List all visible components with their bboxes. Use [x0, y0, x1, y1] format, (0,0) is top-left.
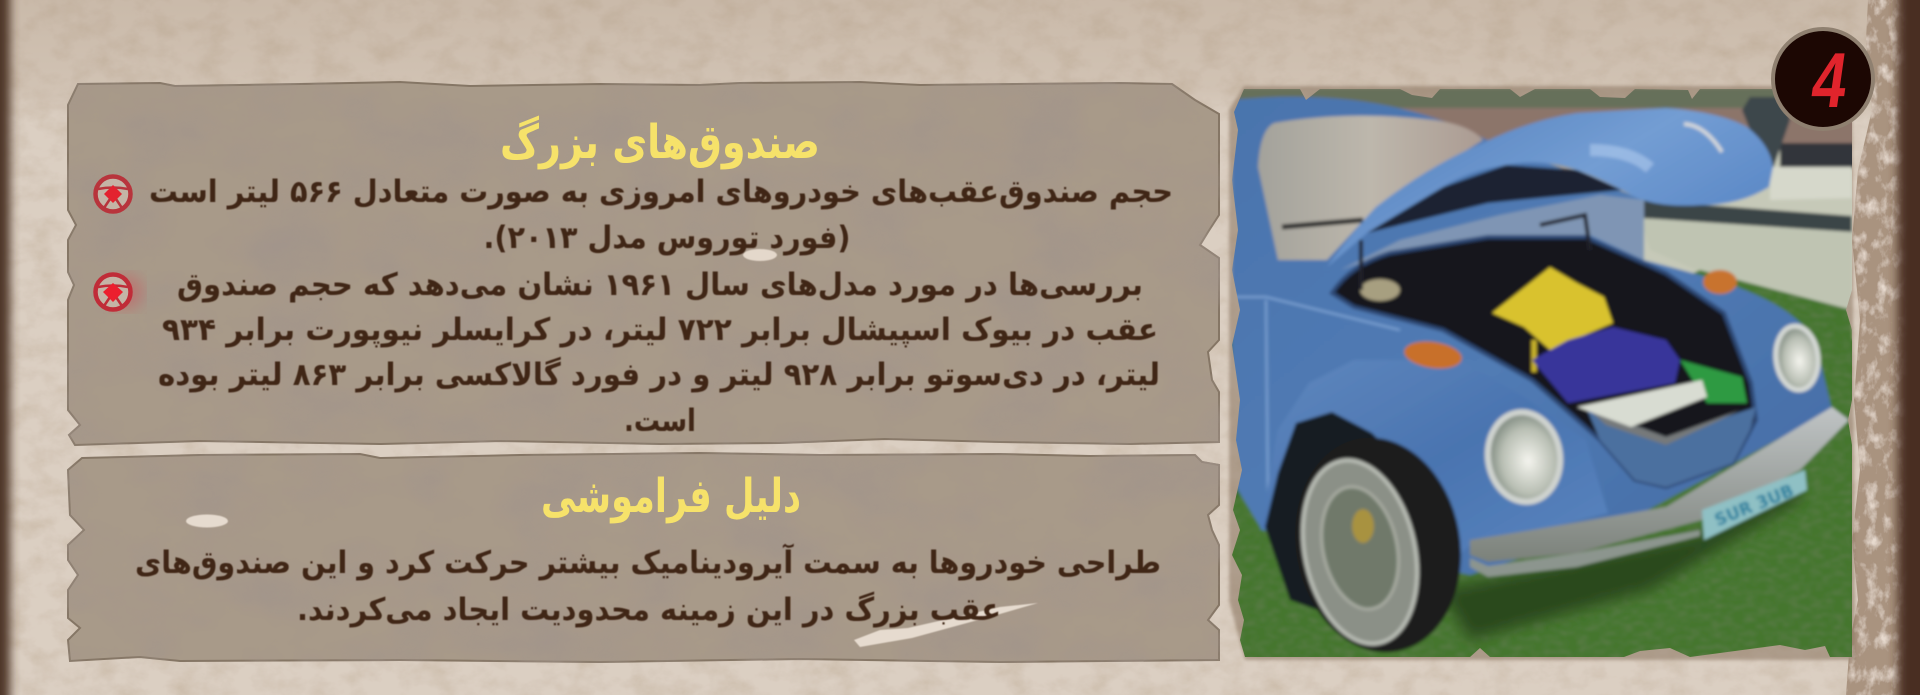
blue bag — [1532, 327, 1680, 403]
trunk floor — [1586, 407, 1756, 487]
neighbouring white car — [1642, 96, 1852, 235]
headlight right — [1773, 324, 1821, 392]
wheel arch — [1263, 410, 1378, 610]
panel: reason forgotten — [68, 453, 1219, 662]
text block: trunk volumes: (فورد توروس مدل ۲۰۱۳). — [484, 220, 850, 256]
lid handle — [1684, 124, 1722, 152]
tear mark — [743, 249, 777, 261]
raised lid underside — [1367, 165, 1622, 233]
green cloth — [1680, 360, 1747, 403]
beige luggage — [1360, 279, 1400, 301]
indicator left — [1402, 338, 1464, 372]
license plate: SUR 3UB — [1712, 481, 1797, 531]
wiper — [1282, 220, 1363, 227]
scenery behind the car — [1230, 88, 1855, 660]
number badge: 4: 4 — [1807, 36, 1853, 124]
text block: trunk volumes: بررسی‌ها در مورد مدل‌های سال ۱۹۶۱ نشان می‌دهد که حجم صندوق — [177, 267, 1143, 303]
text block: trunk volumes: حجم صندوق‌عقب‌های خودروهای امروزی به صورت متعادل ۵۶۶ لیتر است — [149, 174, 1173, 210]
raised lid — [1327, 108, 1773, 267]
text block: explanation: عقب بزرگ در این زمینه محدودیت ایجاد می‌کردند. — [297, 591, 1001, 628]
tyre — [1317, 436, 1463, 654]
text block: trunk volumes: است. — [624, 403, 696, 439]
lid highlight — [1590, 150, 1650, 168]
white cloth — [1577, 380, 1707, 427]
lower bumper strip — [1470, 530, 1700, 577]
panel shape: torn paper — [68, 82, 1219, 445]
bumper — [1470, 407, 1849, 562]
photo frame shadow — [1229, 86, 1855, 660]
photo: blue beetle with open trunk — [1229, 86, 1855, 666]
yellow cloth strap — [1532, 340, 1536, 372]
car body — [1232, 97, 1832, 575]
license plate — [1702, 470, 1807, 540]
shadow under the car — [1440, 480, 1800, 640]
tear mark — [186, 514, 228, 528]
photo content — [1230, 88, 1855, 666]
icon: steering wheel bullet 2 — [96, 274, 143, 310]
text block: explanation — [135, 543, 1161, 628]
hub cap — [1352, 509, 1374, 543]
heading: reason forgotten: دلیل فراموشی — [541, 469, 801, 524]
windshield — [1258, 116, 1483, 260]
text block: trunk volumes: لیتر، در دی‌سوتو برابر ۹۲۸ لیتر و در فورد گالاکسی برابر ۸۶۳ لیتر بوده — [158, 356, 1160, 393]
door seam — [1232, 297, 1400, 500]
grass — [1232, 270, 1852, 660]
tear streak — [854, 603, 1038, 647]
text block: trunk volumes — [149, 174, 1173, 439]
panel: big trunks — [68, 82, 1219, 445]
headlight left — [1482, 407, 1566, 507]
cowl seen under the lid — [1340, 195, 1644, 270]
indicator right — [1703, 270, 1737, 294]
yellow cloth — [1492, 267, 1613, 350]
icon: steering wheel bullet 1 — [96, 176, 130, 212]
right edge: worn brown border — [1846, 0, 1920, 695]
wheel rim — [1298, 455, 1422, 649]
text block: explanation: طراحی خودروها به سمت آیرودینامیک بیشتر حرکت کرد و این صندوق‌های — [135, 543, 1161, 581]
left edge: worn brown border — [0, 0, 10, 695]
trunk cavity — [1332, 237, 1756, 487]
lid strut — [1361, 215, 1590, 290]
text block: trunk volumes: عقب در بیوک اسپیشال برابر ۷۲۲ لیتر، در کرایسلر نیوپورت برابر ۹۳۴ — [162, 312, 1158, 348]
number badge: 4 — [1773, 29, 1873, 129]
left fender — [1260, 360, 1608, 562]
panel shape: torn paper — [68, 453, 1219, 662]
heading: big trunks: صندوق‌های بزرگ — [500, 115, 820, 170]
